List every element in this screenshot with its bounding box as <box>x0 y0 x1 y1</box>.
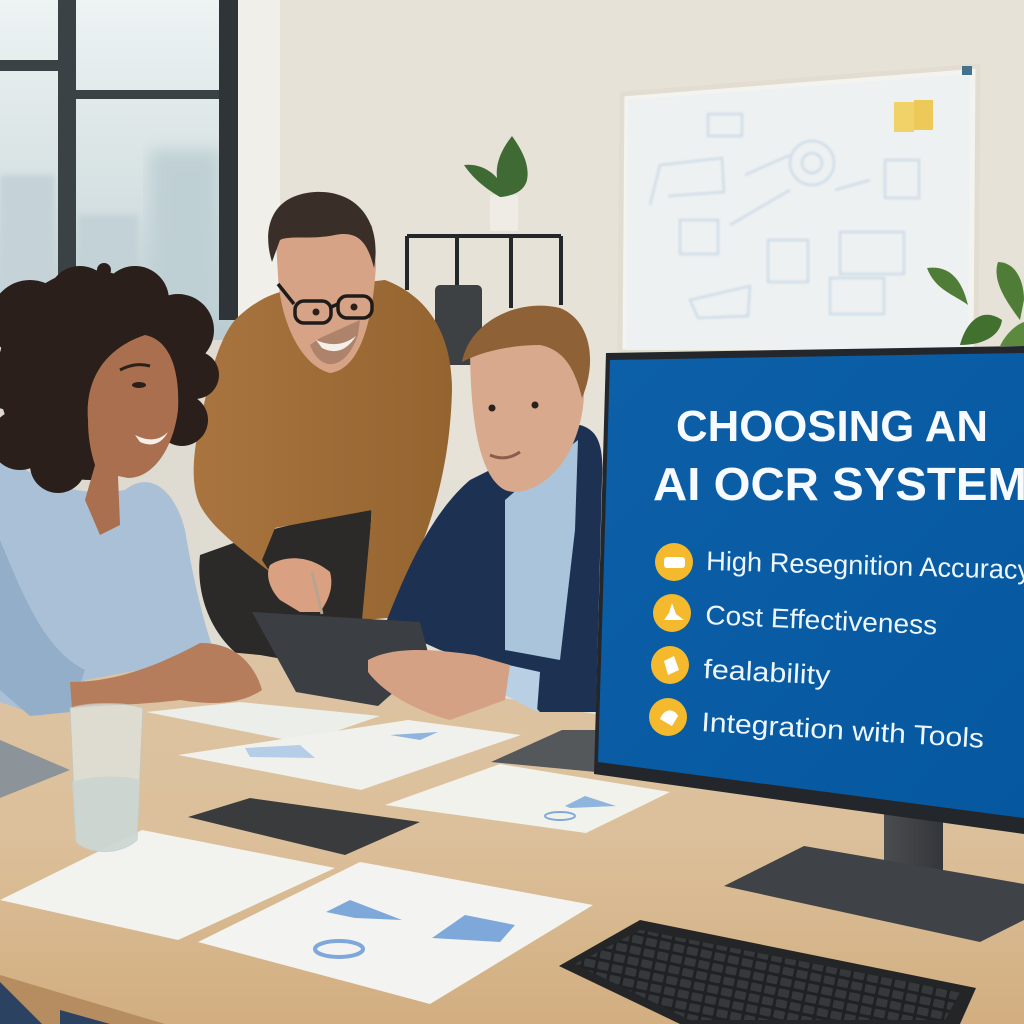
hand pointing <box>268 558 331 612</box>
heading: AI OCR SYSTEM <box>653 458 1024 510</box>
tablet and hands <box>252 612 510 720</box>
list item: cost effectiveness <box>653 594 938 641</box>
window with city view <box>0 0 238 340</box>
woman in blue shirt <box>0 263 262 716</box>
papers on the table <box>0 702 670 1004</box>
monitor <box>594 346 1024 834</box>
list item: feasibility <box>651 646 832 691</box>
monitor stand <box>724 812 1024 942</box>
keyboard <box>559 920 976 1024</box>
curly hair <box>0 263 219 493</box>
heading: CHOOSING AN <box>676 402 988 451</box>
man in brown sweater <box>194 192 452 660</box>
whiteboard with sketches <box>620 66 978 352</box>
list item: integration: Integration with Tools <box>701 707 985 754</box>
list item: cost effectiveness: Cost Effectiveness <box>705 600 938 641</box>
plant behind monitor <box>927 262 1024 346</box>
list item: integration <box>649 698 985 754</box>
shelf with plant and box <box>407 136 561 365</box>
glasses <box>278 284 372 323</box>
man in navy blazer <box>385 306 602 712</box>
table <box>0 642 1024 1024</box>
devices on the table <box>0 730 596 855</box>
list item: recognition accuracy: High Resegnition Accuracy <box>706 546 1024 585</box>
list item: feasibility: fealability <box>703 654 832 691</box>
water glass <box>70 704 143 852</box>
heading <box>653 402 1024 510</box>
